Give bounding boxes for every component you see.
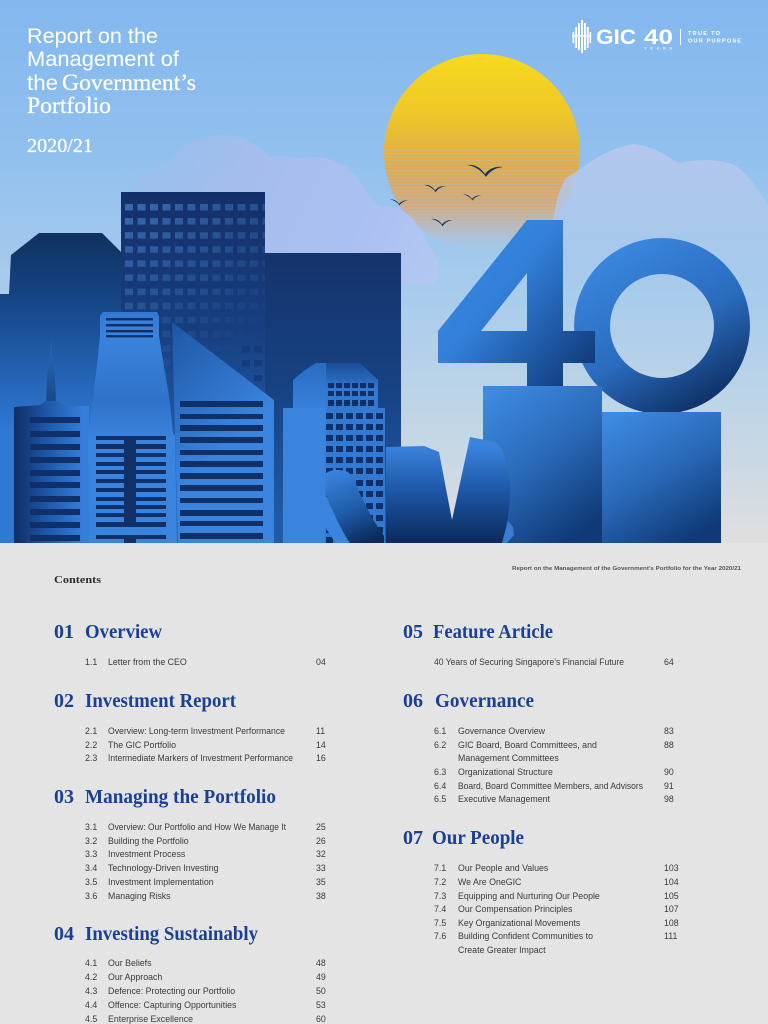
section 01 overview: Overview xyxy=(85,621,163,643)
section 03 managing the portfolio: Investment Implementation xyxy=(108,877,214,887)
section 04 investing sustainably: Enterprise Excellence xyxy=(108,1014,193,1024)
logo: GIC 40 years: YEARS xyxy=(644,46,672,50)
section 07 our people: Our People and Values xyxy=(458,863,549,873)
report title: Management of xyxy=(27,48,179,71)
bottle-shaped tower xyxy=(88,312,177,543)
section 07 our people: 111 xyxy=(664,931,677,941)
building with spire xyxy=(14,340,89,543)
section 07 our people: Our People xyxy=(432,827,524,849)
section 06 governance: Board, Board Committee Members, and Advisors xyxy=(458,781,644,791)
section 06 governance: 98 xyxy=(664,794,674,804)
report title: the xyxy=(27,72,58,95)
section 03 managing the portfolio: 03 xyxy=(54,786,74,808)
lotus building right petals xyxy=(386,437,514,543)
cloud left xyxy=(174,135,439,285)
section 07 our people: 104 xyxy=(664,877,679,887)
section 06 governance xyxy=(403,690,674,804)
logo: GIC 40 years: 40 xyxy=(644,26,673,49)
section 06 governance: 6.4 xyxy=(434,781,446,791)
report title xyxy=(27,25,196,118)
section 03 managing the portfolio: 3.4 xyxy=(85,863,97,873)
section 04 investing sustainably: Our Beliefs xyxy=(108,958,152,968)
section 07 our people: 7.4 xyxy=(434,904,446,914)
back building left xyxy=(0,233,125,543)
section 01 overview xyxy=(54,621,326,667)
report year: 2020/21 xyxy=(27,136,93,157)
section 04 investing sustainably: 4.1 xyxy=(85,958,97,968)
section 02 investment report: 2.1 xyxy=(85,726,97,736)
section 06 governance: 6.2 xyxy=(434,740,446,750)
section 03 managing the portfolio: Managing Risks xyxy=(108,891,171,901)
sky xyxy=(0,0,768,543)
report title: Report on the xyxy=(27,25,158,48)
section 03 managing the portfolio xyxy=(54,786,326,901)
section 04 investing sustainably: 4.3 xyxy=(85,986,97,996)
section 07 our people: 7.2 xyxy=(434,877,446,887)
section 02 investment report: Overview: Long-term Investment Performance xyxy=(108,726,285,736)
numeral 4 xyxy=(438,220,595,386)
section 05 feature article: 64 xyxy=(664,657,674,667)
section 06 governance: Organizational Structure xyxy=(458,767,553,777)
section 03 managing the portfolio: 38 xyxy=(316,891,326,901)
section 06 governance: 06 xyxy=(403,690,423,712)
section 07 our people: 108 xyxy=(664,918,679,928)
section 04 investing sustainably: Offence: Capturing Opportunities xyxy=(108,1000,237,1010)
section 06 governance: 91 xyxy=(664,781,674,791)
section 06 governance: Governance xyxy=(435,690,534,712)
section 05 feature article: 05 xyxy=(403,621,423,643)
section 01 overview: Letter from the CEO xyxy=(108,657,187,667)
report title: Government’s xyxy=(62,70,196,95)
section 03 managing the portfolio: Technology-Driven Investing xyxy=(108,863,219,873)
cloud right xyxy=(553,144,768,242)
section 04 investing sustainably: Defence: Protecting our Portfolio xyxy=(108,986,235,996)
section 03 managing the portfolio: 33 xyxy=(316,863,326,873)
domed tower light side xyxy=(283,363,326,543)
section 03 managing the portfolio: 3.6 xyxy=(85,891,97,901)
section 02 investment report: 14 xyxy=(316,740,326,750)
running header: Report on the Management of the Government’s Portfolio for the Year 2020/21 xyxy=(512,566,742,572)
section 04 investing sustainably: Investing Sustainably xyxy=(85,923,258,945)
report title: Portfolio xyxy=(27,93,111,118)
section 03 managing the portfolio: 3.3 xyxy=(85,849,97,859)
section 05 feature article: 40 Years of Securing Singapore’s Financial Future xyxy=(434,657,624,667)
box plinth right xyxy=(602,412,721,543)
logo: GIC 40 years: OUR PURPOSE xyxy=(688,38,741,44)
section 03 managing the portfolio: Investment Process xyxy=(108,849,186,859)
section 07 our people xyxy=(403,827,679,955)
section 07 our people: 7.1 xyxy=(434,863,446,873)
section 01 overview: 04 xyxy=(316,657,326,667)
section 07 our people: 07 xyxy=(403,827,423,849)
section 02 investment report xyxy=(54,690,326,763)
contents label: Contents xyxy=(54,574,102,586)
section 06 governance: 6.5 xyxy=(434,794,446,804)
section 02 investment report: Intermediate Markers of Investment Performance xyxy=(108,753,293,763)
section 02 investment report: The GIC Portfolio xyxy=(108,740,176,750)
section 04 investing sustainably: 4.4 xyxy=(85,1000,97,1010)
section 07 our people: Key Organizational Movements xyxy=(458,918,581,928)
section 05 feature article xyxy=(403,621,674,667)
section 06 governance: 90 xyxy=(664,767,674,777)
section 02 investment report: 16 xyxy=(316,753,326,763)
section 05 feature article: Feature Article xyxy=(433,621,553,643)
section 06 governance: Management Committees xyxy=(458,753,559,763)
domed tower window side xyxy=(325,363,385,543)
section 06 governance: Executive Management xyxy=(458,794,550,804)
section 02 investment report: Investment Report xyxy=(85,690,236,712)
section 03 managing the portfolio: Overview: Our Portfolio and How We Manage It xyxy=(108,822,287,832)
section 06 governance: GIC Board, Board Committees, and xyxy=(458,740,597,750)
logo: GIC 40 years xyxy=(572,20,741,53)
section 06 governance: 88 xyxy=(664,740,674,750)
sun xyxy=(384,54,580,250)
section 03 managing the portfolio: 32 xyxy=(316,849,326,859)
section 07 our people: 103 xyxy=(664,863,679,873)
section 03 managing the portfolio: 3.1 xyxy=(85,822,97,832)
numeral 0 xyxy=(574,238,750,414)
section 06 governance: Governance Overview xyxy=(458,726,546,736)
section 04 investing sustainably xyxy=(54,923,326,1024)
section 06 governance: 6.3 xyxy=(434,767,446,777)
section 04 investing sustainably: 50 xyxy=(316,986,326,996)
section 07 our people: 7.3 xyxy=(434,891,446,901)
section 02 investment report: 2.2 xyxy=(85,740,97,750)
section 04 investing sustainably: 4.5 xyxy=(85,1014,97,1024)
section 07 our people: We Are OneGIC xyxy=(458,877,522,887)
section 07 our people: Equipping and Nurturing Our People xyxy=(458,891,600,901)
section 04 investing sustainably: 60 xyxy=(316,1014,326,1024)
section 04 investing sustainably: 53 xyxy=(316,1000,326,1010)
section 07 our people: 107 xyxy=(664,904,679,914)
section 02 investment report: 11 xyxy=(316,726,325,736)
section 03 managing the portfolio: Building the Portfolio xyxy=(108,836,189,846)
section 03 managing the portfolio: 35 xyxy=(316,877,326,887)
panel: cover illustration xyxy=(0,0,768,543)
lotus building left petals xyxy=(325,470,384,543)
section 04 investing sustainably: 48 xyxy=(316,958,326,968)
section 07 our people: Building Confident Communities to xyxy=(458,931,593,941)
section 04 investing sustainably: 4.2 xyxy=(85,972,97,982)
section 02 investment report: 2.3 xyxy=(85,753,97,763)
section 04 investing sustainably: 04 xyxy=(54,923,74,945)
section 03 managing the portfolio: Managing the Portfolio xyxy=(85,786,276,808)
section 03 managing the portfolio: 3.5 xyxy=(85,877,97,887)
section 03 managing the portfolio: 25 xyxy=(316,822,326,832)
section 04 investing sustainably: Our Approach xyxy=(108,972,162,982)
back tower with windows xyxy=(121,192,265,543)
section 07 our people: Our Compensation Principles xyxy=(458,904,573,914)
logo: GIC 40 years: TRUE TO xyxy=(688,31,721,37)
section 07 our people: 7.6 xyxy=(434,931,446,941)
section 03 managing the portfolio: 3.2 xyxy=(85,836,97,846)
birds xyxy=(390,165,503,226)
section 06 governance: 83 xyxy=(664,726,674,736)
section 01 overview: 01 xyxy=(54,621,74,643)
section 03 managing the portfolio: 26 xyxy=(316,836,326,846)
section 02 investment report: 02 xyxy=(54,690,74,712)
section 07 our people: 105 xyxy=(664,891,679,901)
box plinth left xyxy=(483,386,602,543)
section 06 governance: 6.1 xyxy=(434,726,446,736)
section 07 our people: 7.5 xyxy=(434,918,446,928)
section 07 our people: Create Greater Impact xyxy=(458,945,546,955)
section 04 investing sustainably: 49 xyxy=(316,972,326,982)
logo: GIC 40 years: GIC xyxy=(596,26,636,49)
section 01 overview: 1.1 xyxy=(85,657,97,667)
diagonal-roof building xyxy=(172,322,274,543)
back building right xyxy=(265,253,401,543)
